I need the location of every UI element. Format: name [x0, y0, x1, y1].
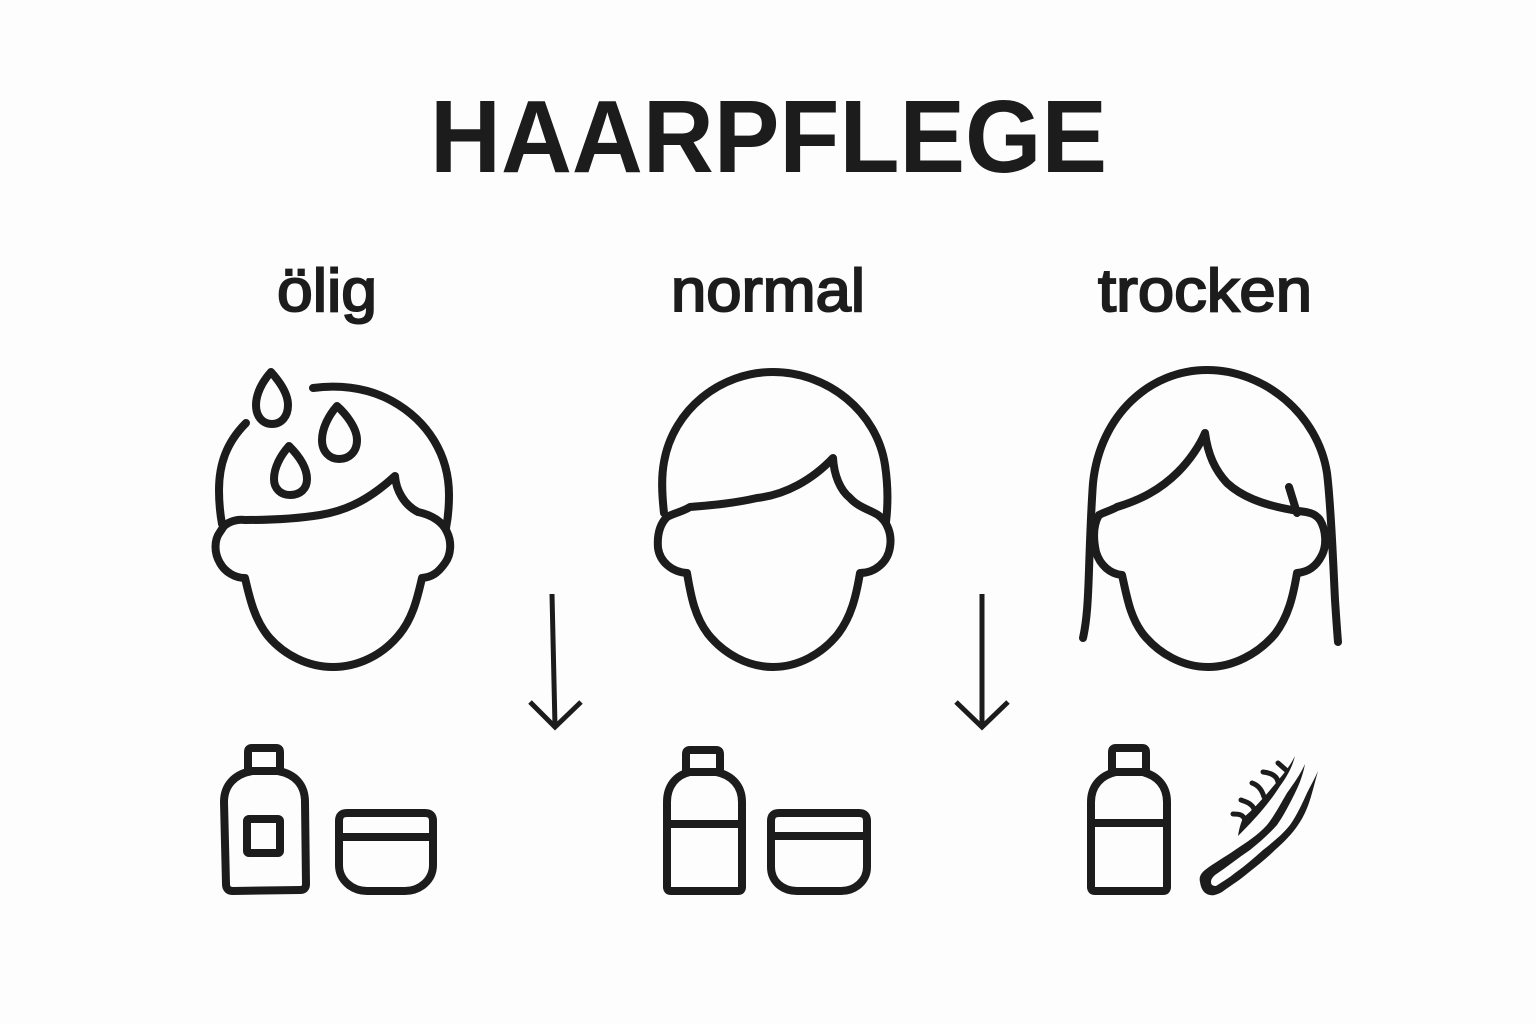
oily hair outline [219, 387, 449, 528]
brush handle [1200, 764, 1318, 895]
brush bristles [1233, 763, 1286, 820]
arrow: first [530, 594, 581, 727]
icon: bottle (normal) [667, 750, 742, 891]
heading: ölig: ölig [277, 257, 377, 324]
drop 3 [274, 446, 307, 495]
icon: bottle (dry) [1091, 748, 1167, 891]
icon: jar (oily) [339, 813, 433, 891]
heading: trocken: trocken [1098, 257, 1312, 324]
icon: oily hair head with drops [216, 372, 450, 667]
long hair outline [1083, 370, 1338, 642]
icon: normal hair head [658, 372, 890, 667]
oily face and fringe [216, 476, 450, 667]
arrow: second [956, 594, 1008, 727]
brush spine [1238, 756, 1295, 836]
icon: jar (normal) [771, 813, 867, 891]
hair strand [1289, 487, 1297, 513]
drop 2 [322, 406, 357, 459]
drop 1 [256, 372, 288, 424]
heading: normal: normal [671, 257, 865, 324]
dry face and fringe [1094, 433, 1325, 667]
normal face and fringe [658, 458, 890, 667]
icon: hair brush [1200, 756, 1318, 895]
title: HAARPFLEGE [430, 79, 1107, 194]
icon: bottle with label (oily) [224, 748, 306, 891]
normal hair outline [662, 372, 887, 522]
icon: dry long hair head [1083, 370, 1338, 667]
